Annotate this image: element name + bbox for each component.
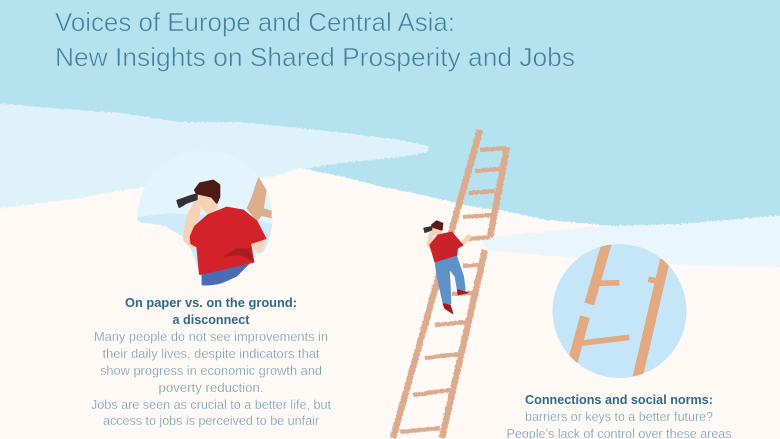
circle: broken ladder xyxy=(552,243,686,378)
ground: snowy hill xyxy=(0,168,780,439)
text block: on paper vs. on the ground: Many people do not see improvements in xyxy=(94,329,328,344)
climbing man with binoculars xyxy=(424,221,472,313)
text block: on paper vs. on the ground: poverty reduction. xyxy=(158,380,264,395)
main ladder xyxy=(393,130,507,438)
text block: connections and social norms: Connections and social norms: xyxy=(525,392,713,407)
text block: connections and social norms xyxy=(506,392,732,439)
pale cloud: upper left xyxy=(0,103,429,215)
text block: on paper vs. on the ground: their daily lives, despite indicators that xyxy=(102,346,320,361)
text block: on paper vs. on the ground: Jobs are seen as crucial to a better life, but xyxy=(91,397,331,412)
text block: on paper vs. on the ground: On paper vs. on the ground: xyxy=(125,295,297,310)
pale cloud: lower right band xyxy=(480,215,780,267)
text block: on paper vs. on the ground: access to jobs is perceived to be unfair xyxy=(103,413,320,428)
text block: on paper vs. on the ground xyxy=(91,295,331,428)
title: New Insights on Shared Prosperity and Jobs xyxy=(55,42,575,72)
text block: on paper vs. on the ground: show progress in economic growth and xyxy=(100,363,322,378)
text block: connections and social norms: barriers or keys to a better future? xyxy=(525,409,713,424)
text block: on paper vs. on the ground: a disconnect xyxy=(172,312,250,327)
circle: man looking through binoculars xyxy=(138,176,272,286)
title: Voices of Europe and Central Asia: xyxy=(55,7,455,37)
title xyxy=(55,7,575,72)
ladder fragment xyxy=(247,177,272,222)
